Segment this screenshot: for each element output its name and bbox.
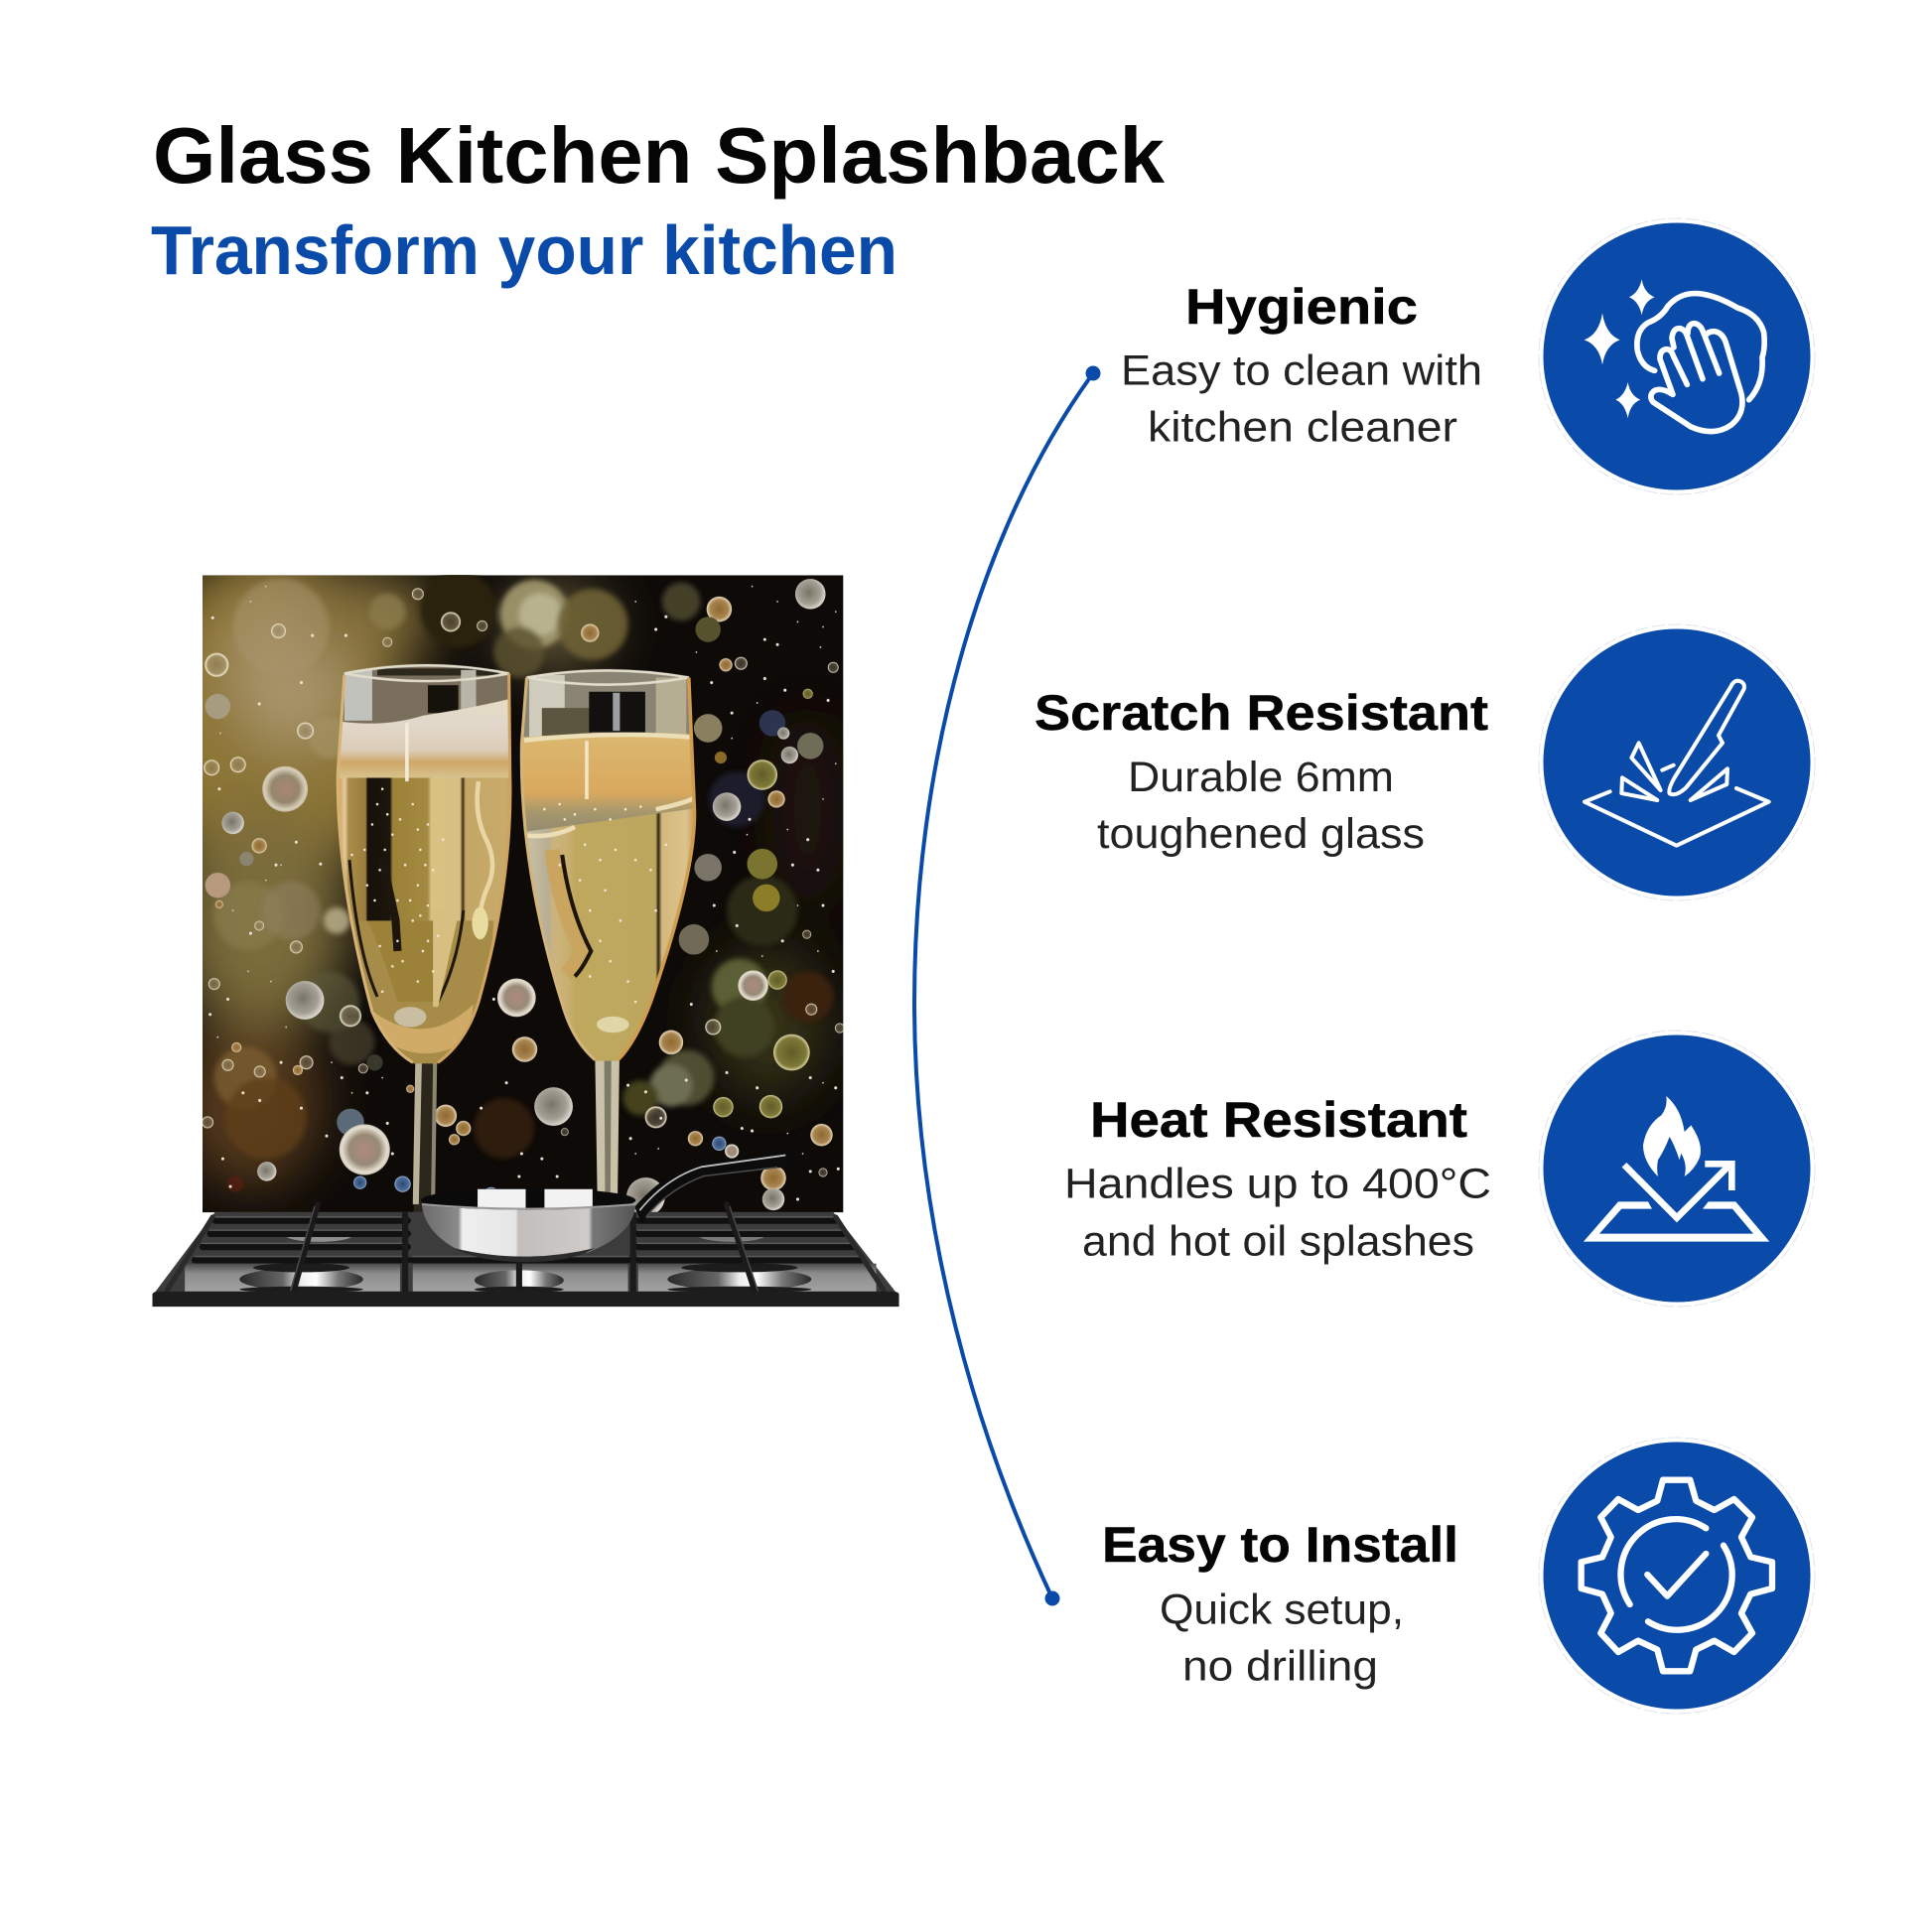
description: and hot oil splashes — [1082, 1217, 1474, 1265]
cast iron grates — [167, 1204, 884, 1291]
gas hob — [152, 1204, 899, 1307]
description: no drilling — [1182, 1642, 1378, 1690]
description: kitchen cleaner — [1148, 403, 1457, 451]
description: toughened glass — [1097, 810, 1425, 858]
icon: knife scratching glass — [1539, 624, 1815, 900]
description — [1097, 754, 1425, 858]
icon: gear with check mark — [1539, 1438, 1815, 1714]
icon: flame deflected from surface — [1539, 1031, 1815, 1307]
feature: scratch resistant — [1035, 685, 1488, 858]
right champagne glass — [519, 662, 696, 1214]
frying pan — [421, 1153, 792, 1262]
heading: Heat Resistant — [1090, 1092, 1467, 1148]
heading: Hygienic — [1185, 279, 1418, 335]
subtitle: Transform your kitchen — [151, 211, 897, 289]
heading: Easy to Install — [1102, 1517, 1458, 1573]
description: Easy to clean with — [1121, 347, 1482, 395]
description: Quick setup, — [1160, 1587, 1404, 1634]
left champagne glass — [335, 657, 514, 1214]
description: Handles up to 400°C — [1064, 1160, 1491, 1207]
title: Glass Kitchen Splashback — [153, 111, 1166, 200]
description: Durable 6mm — [1128, 754, 1394, 801]
heading: Scratch Resistant — [1035, 685, 1488, 741]
feature: hygienic — [1121, 279, 1482, 451]
feature: easy to install — [1102, 1517, 1458, 1690]
description — [1064, 1160, 1491, 1265]
product image: splashback above hob — [134, 546, 899, 1307]
bubbles — [202, 579, 845, 1216]
description — [1160, 1587, 1404, 1690]
feature: heat resistant — [1064, 1092, 1491, 1265]
connecting curve with end dots — [914, 365, 1100, 1606]
bokeh discs — [213, 571, 833, 1159]
burners — [239, 1230, 811, 1293]
tiny droplets — [210, 571, 838, 1199]
description — [1121, 347, 1482, 451]
front lip — [152, 1292, 899, 1307]
icon: hand wiping with cloth and sparkles — [1539, 218, 1815, 494]
splashback panel with bokeh artwork — [203, 575, 844, 1213]
